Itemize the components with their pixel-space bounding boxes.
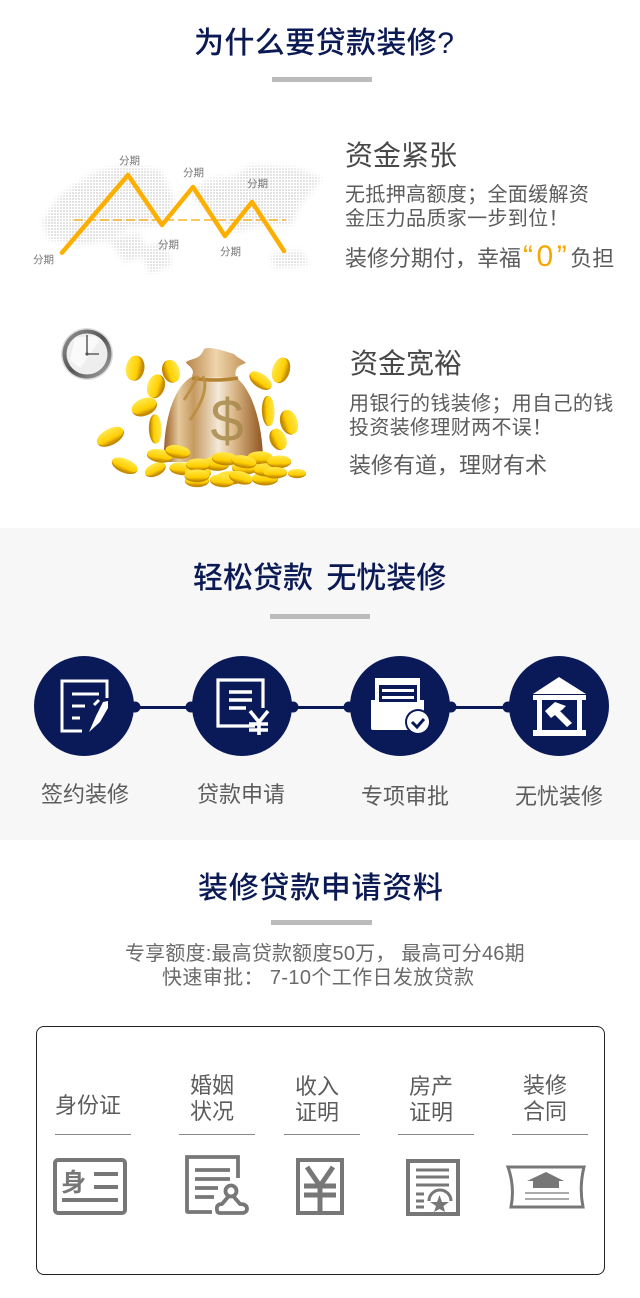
chart: instalment line over world map: 分期 xyxy=(220,246,241,258)
icon: property certificate xyxy=(408,1161,458,1214)
text: zero burden slogan: 装修分期付，幸福“0”负担 xyxy=(345,240,614,273)
heading: ample funds: 资金宽裕 xyxy=(350,348,462,379)
label: step 1: 签约装修 xyxy=(41,782,129,807)
label: step 4: 无忧装修 xyxy=(515,784,603,809)
illustration: money bag with coins: $ xyxy=(210,387,244,454)
icon: income proof xyxy=(298,1160,342,1213)
chart: instalment line over world map: 分期 xyxy=(33,254,54,266)
chart: instalment line over world map: 分期 xyxy=(119,155,140,167)
icon: signing xyxy=(62,681,108,732)
icon: marriage certificate xyxy=(187,1157,247,1213)
text: tight funds description line 2: 金压力品质家一步到位！ xyxy=(345,208,569,230)
title: why loan: 为什么要贷款装修? xyxy=(194,27,454,60)
chart: instalment line over world map: 分期 xyxy=(247,178,268,190)
icon: ID card xyxy=(55,1160,125,1213)
text: quota: 专享额度:最高贷款额度50万， 最高可分46期 xyxy=(125,943,525,965)
label: step 3: 专项审批 xyxy=(361,784,449,809)
heading: application materials: 装修贷款申请资料 xyxy=(198,872,444,905)
label: marriage status xyxy=(190,1073,234,1124)
label: renovation contract xyxy=(523,1073,567,1124)
text: tight funds description: 无抵押高额度；全面缓解资 xyxy=(345,184,589,206)
illustration: money bag with coins xyxy=(96,348,306,488)
chart: instalment line over world map: 分期 xyxy=(183,167,204,179)
label: property proof: 房产 xyxy=(409,1074,453,1099)
text: approval time: 快速审批： 7-10个工作日发放贷款 xyxy=(162,967,474,989)
label: marriage status: 状况 xyxy=(190,1099,234,1124)
flow: connector line and step circles xyxy=(34,656,609,756)
panel: materials box xyxy=(36,1026,605,1275)
heading: easy loan: 轻松贷款 无忧装修 xyxy=(193,562,446,595)
label: marriage status: 婚姻 xyxy=(190,1073,234,1098)
icon: ID card: 身 xyxy=(61,1169,86,1197)
icon: clock xyxy=(61,328,113,380)
icon: approval folder xyxy=(371,678,431,735)
label: income proof: 证明 xyxy=(295,1100,339,1125)
icon: renovation contract xyxy=(508,1167,584,1207)
chart: instalment line over world map xyxy=(33,155,320,274)
chart: instalment line over world map: 分期 xyxy=(158,239,179,251)
text: ample funds slogan: 装修有道，理财有术 xyxy=(349,453,547,478)
label: property proof xyxy=(409,1074,453,1125)
icon: loan application xyxy=(218,680,268,735)
label: income proof xyxy=(295,1074,339,1125)
text: ample funds description: 用银行的钱装修；用自己的钱 xyxy=(349,393,614,415)
label: ID card: 身份证 xyxy=(55,1093,121,1118)
icons: required documents xyxy=(53,1155,586,1216)
label: property proof: 证明 xyxy=(409,1100,453,1125)
label: step 2: 贷款申请 xyxy=(197,782,285,807)
label: renovation contract: 装修 xyxy=(523,1073,567,1098)
label: income proof: 收入 xyxy=(295,1074,339,1099)
label: renovation contract: 合同 xyxy=(523,1099,567,1124)
icon: building with hammer xyxy=(533,677,586,736)
panel: easy loan steps xyxy=(0,528,640,840)
text: ample funds description line 2: 投资装修理财两不误！ xyxy=(349,417,552,439)
heading: tight funds: 资金紧张 xyxy=(345,140,457,171)
